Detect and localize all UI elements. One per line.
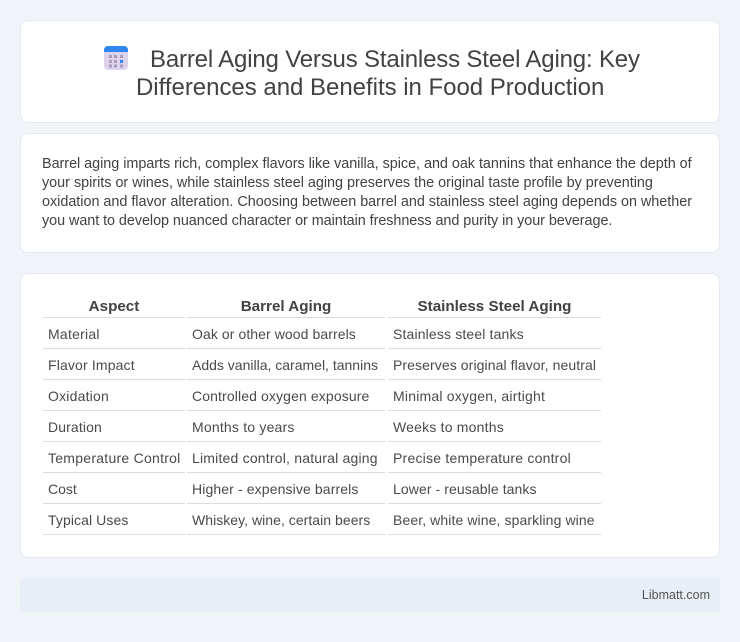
intro text: oxidation and flavor alteration. Choosing between barrel and stainless steel aging depends on whether xyxy=(42,194,692,210)
header: barrel aging: Barrel Aging xyxy=(241,298,331,315)
comparison table: Stainless steel tanks xyxy=(393,326,524,342)
row: material: Material xyxy=(48,326,100,342)
comparison table: Adds vanilla, caramel, tannins xyxy=(192,357,378,373)
row: temperature control: Temperature Control xyxy=(48,450,181,466)
comparison table: Months to years xyxy=(192,419,295,435)
comparison table: Minimal oxygen, airtight xyxy=(393,388,545,404)
row: cost: Cost xyxy=(48,481,77,497)
comparison table: Lower - reusable tanks xyxy=(393,481,537,497)
row: typical uses: Typical Uses xyxy=(48,512,128,528)
comparison table: Higher - expensive barrels xyxy=(192,481,359,497)
panel: table card xyxy=(20,273,720,558)
comparison table: Whiskey, wine, certain beers xyxy=(192,512,370,528)
comparison table: Preserves original flavor, neutral xyxy=(393,357,596,373)
icon: calendar xyxy=(104,46,128,70)
footer bar xyxy=(20,578,720,612)
comparison table: Limited control, natural aging xyxy=(192,450,378,466)
comparison table: Precise temperature control xyxy=(393,450,571,466)
header: aspect: Aspect xyxy=(89,298,139,315)
header: stainless steel aging: Stainless Steel Aging xyxy=(418,298,571,315)
intro text xyxy=(42,156,692,229)
comparison table: Oak or other wood barrels xyxy=(192,326,356,342)
comparison table: Weeks to months xyxy=(393,419,504,435)
intro text: you want to develop nuanced character or maintain freshness and purity in your beverage. xyxy=(42,213,612,229)
panel: title card xyxy=(20,20,720,123)
row: duration: Duration xyxy=(48,419,102,435)
row: oxidation: Oxidation xyxy=(48,388,109,404)
intro text: your spirits or wines, while stainless steel aging preserves the original taste profile by preventing xyxy=(42,175,653,191)
comparison table xyxy=(43,298,601,535)
title: Barrel Aging Versus Stainless Steel Aging: Key xyxy=(150,46,640,73)
intro text: Barrel aging imparts rich, complex flavors like vanilla, spice, and oak tannins that enhance the depth of xyxy=(42,156,692,172)
footer brand: Libmatt.com xyxy=(642,588,710,602)
comparison table: Beer, white wine, sparkling wine xyxy=(393,512,595,528)
title line 2: Differences and Benefits in Food Production xyxy=(136,74,604,101)
row: flavor impact: Flavor Impact xyxy=(48,357,135,373)
panel: intro card xyxy=(20,133,720,253)
comparison table: Controlled oxygen exposure xyxy=(192,388,369,404)
